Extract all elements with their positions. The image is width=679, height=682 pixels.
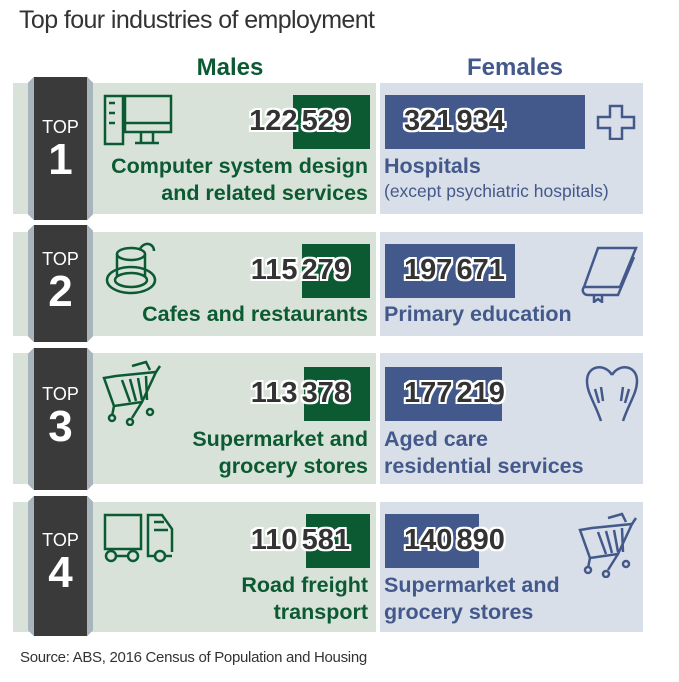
label: males 4 <box>241 573 368 624</box>
label: males 2: Cafes and restaurants <box>142 302 368 326</box>
label: males 3: Supermarket and <box>192 427 368 451</box>
label: females 3 <box>384 427 584 478</box>
icon: shopping cart female <box>578 512 637 578</box>
bar: females 1 <box>385 95 585 149</box>
icon: coffee cup <box>106 242 156 294</box>
label: males 4: transport <box>274 600 368 624</box>
source note: Source: ABS, 2016 Census of Population and Housing <box>20 649 367 666</box>
title: Top four industries of employment <box>19 6 374 34</box>
label: males 3 <box>192 427 368 478</box>
value: males 3: 113 378 <box>251 377 350 409</box>
icon: computer <box>104 94 172 146</box>
panel: row 2 males <box>13 232 376 336</box>
tab: top 2: TOP <box>42 249 79 269</box>
heading: Males: Males <box>197 54 263 81</box>
value: males 2: 115 279 <box>251 254 350 286</box>
label: females 1 <box>384 154 609 201</box>
tab: top 2 <box>28 225 93 342</box>
label: females 4: grocery stores <box>384 600 533 624</box>
panel: row 2 females <box>380 232 643 336</box>
label: males 1: Computer system design <box>111 154 368 178</box>
bar: males 4 <box>306 514 370 568</box>
tab: top 3 <box>28 348 93 490</box>
value: females 3: 177 219 <box>404 377 505 409</box>
value: females 1: 321 934 <box>404 105 505 137</box>
panel: row 1 males <box>13 83 376 214</box>
label: females 1: (except psychiatric hospitals) <box>384 181 609 201</box>
label: males 1: and related services <box>161 181 368 205</box>
label: females 4 <box>384 573 560 624</box>
label: males 3: grocery stores <box>219 454 368 478</box>
label: males 4: Road freight <box>241 573 368 597</box>
label: females 4: Supermarket and <box>384 573 560 597</box>
tab: top 4: TOP <box>42 530 79 550</box>
icon: cross <box>596 104 636 140</box>
bar: females 4 <box>385 514 479 568</box>
label: females 3: residential services <box>384 454 584 478</box>
bar: males 1 <box>293 95 370 149</box>
value: males 1: 122 529 <box>249 105 350 137</box>
panel: row 1 females <box>380 83 643 214</box>
bar: females 2 <box>385 244 515 298</box>
tab: top 4 <box>28 496 93 636</box>
tab: top 3: TOP <box>42 384 79 404</box>
panel: row 4 males <box>13 502 376 632</box>
icon: truck <box>104 514 174 562</box>
bar: males 3 <box>304 367 370 421</box>
tab: top 1 <box>28 77 93 220</box>
icon: shopping cart male <box>102 360 161 426</box>
heading: Females: Females <box>467 54 563 81</box>
tab: top 4: 4 <box>48 548 73 597</box>
label: females 3: Aged care <box>384 427 488 451</box>
label: females 2: Primary education <box>384 302 572 326</box>
bar: females 3 <box>385 367 502 421</box>
tab: top 2: 2 <box>48 267 73 316</box>
tab: top 1: TOP <box>42 117 79 137</box>
label: males 1 <box>111 154 368 205</box>
value: females 2: 197 671 <box>404 254 505 286</box>
label: females 1: Hospitals <box>384 154 481 178</box>
icon: book <box>582 246 638 303</box>
value: females 4: 140 890 <box>404 524 505 556</box>
panel: row 3 females <box>380 353 643 484</box>
tab: top 3: 3 <box>48 402 73 451</box>
value: males 4: 110 581 <box>251 524 350 556</box>
panel: row 3 males <box>13 353 376 484</box>
tab: top 1: 1 <box>48 135 73 184</box>
bar: males 2 <box>302 244 370 298</box>
panel: row 4 females <box>380 502 643 632</box>
icon: hands heart <box>586 366 638 422</box>
